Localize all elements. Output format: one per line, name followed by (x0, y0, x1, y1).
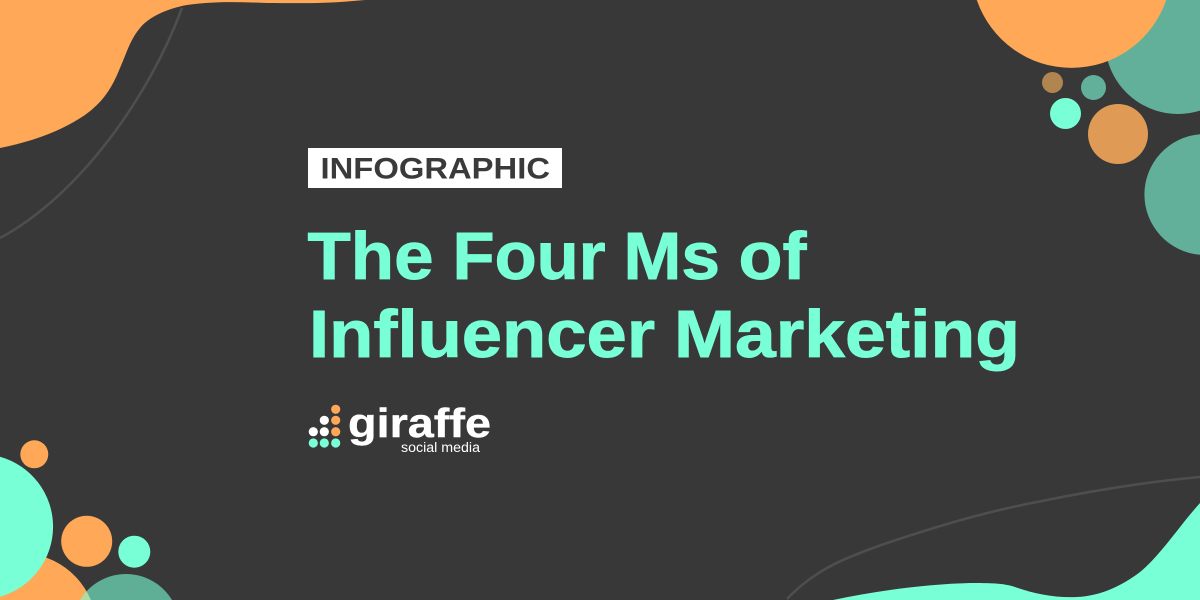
title (308, 219, 1020, 372)
title: Ms (624, 219, 720, 294)
blob: bottom right mint (833, 503, 1200, 600)
label: INFOGRAPHIC (308, 148, 562, 188)
label: INFOGRAPHIC: INFOGRAPHIC (320, 152, 550, 186)
icon: logo dots (309, 405, 340, 448)
title: of (738, 219, 807, 294)
logo: giraffe social media (309, 400, 491, 455)
title: Marketing (674, 297, 1020, 372)
logo: giraffe social media: social media (401, 440, 481, 455)
logo: giraffe social media: giraffe (348, 400, 491, 446)
blob: top left orange (0, 0, 365, 148)
title: Influencer (309, 297, 655, 372)
decoration: top right circles (977, 0, 1200, 255)
title: Four (452, 219, 606, 294)
title: The (308, 219, 434, 294)
decoration: bottom left circles (0, 440, 172, 600)
